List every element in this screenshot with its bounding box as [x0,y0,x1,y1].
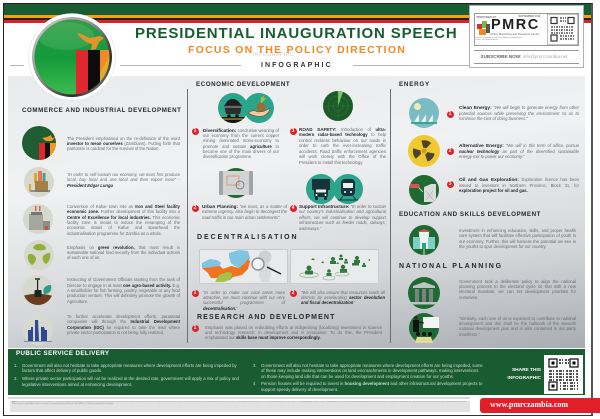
badge 1: 1 [194,290,196,296]
badge 1 [446,110,454,118]
column divider: right [389,89,392,343]
text: idc: To further accelerate development efforts, parastatal companies will through the Industrial Development Corporation (IDC) be required to take the lead where private sector participation is not being fully realized. [67,314,180,335]
icon: green revolution [24,240,54,270]
panel: network of people [290,249,379,284]
header divider lines [10,65,469,66]
qr code [544,355,583,394]
text: clean energy: Clean Energy: “We will begin to generate energy from other potential sources while preserving the environment so as to minimise the cost of doing business.” [459,104,579,121]
pmrc full name: Policy Monitoring and Research Centre [490,32,539,36]
badge 2: 2 [194,204,196,210]
icon: oil can [409,175,439,205]
badge 1 [192,128,198,134]
badge 2 [192,204,198,212]
heading: public service delivery: PUBLIC SERVICE DELIVERY [16,350,109,357]
icon: presenter [409,313,439,343]
badge 1 [192,290,198,296]
text: kafue: Conversion of Kafue town into an Iron and Steel facility economic zone. Further development of this facility into a Centre of Excellence for local industries. This economic facility zone is meant to induce the revamping of the economic status of Kafue and spearhead the industrialisation programme for Zambia as a whole. [67,204,180,236]
delivery item 2: 2. [14,376,18,381]
icon: nuclear [408,135,440,167]
share label [507,368,541,381]
text: buy local quote: “In order to self-sustain our economy, we must first produce local, buy local and use local and then export more” - President Edgar Lungu [67,172,180,188]
delivery item 1: Government will also not hesitate to take appropriate measures where development efforts are being impeded by factors that affect delivery of public goods. [22,362,237,373]
disclaimer box: ABOUT: The Policy Monitoring and Research Centre (PMRC) is a non-partisan policy research institution. This infographic has been prepared for information purposes from the speech delivered by the President at the inauguration. While every effort has been made to ensure accuracy of the information contained here, PMRC accepts no responsibility for errors or omissions. The Policy Monitoring and Research Centre (PMRC) is a non-partisan policy research institution. This infographic has been prepared for information purposes from the speech delivered by the President at the inauguration. While every effort has been made to ensure accuracy of the information contained here, PMRC accepts no responsibility for errors or omissions. The Policy Monitoring and Research Centre (PMRC) is a non-partisan policy research institution. [12,402,467,404]
icon: truck [306,174,334,204]
icon: government building [408,277,440,309]
report date: SEPTEMBER 2016 [518,14,540,18]
icon: hospital school building [409,225,439,255]
infographic label: INFOGRAPHIC [261,62,333,68]
badge 4 [290,204,296,212]
website tag [480,398,600,413]
delivery item 2: Where private sector participation will not be realized at the desired rate, government will apply a mix of policy and legislative interventions aimed at enhancing development. [22,376,239,386]
text: resources quote: “We will also ensure that resources reach all districts by accelerating sector devolution and fiscal decentralization” [301,290,385,305]
share label: INFOGRAPHIC [507,376,541,381]
icon: skyscrapers [24,315,52,345]
delivery item 4: 4. [253,381,257,386]
ghost subtitle: INFOGRAPHIC [253,52,294,58]
title: PRESIDENTIAL INAUGURATION SPEECH [135,25,458,42]
heading: economic development: ECONOMIC DEVELOPMENT [196,80,290,88]
heading: energy: ENERGY [399,81,430,88]
subscribe line: SUBSCRIBE NOW: info@pmrczambia.net [480,54,568,59]
badge 1: 1 [194,128,196,134]
top colour band [3,3,592,23]
icon: factory [23,204,53,234]
badge 2 [290,290,296,296]
delivery item 1: 1. [14,362,18,368]
text: investor: The President emphasised on the re-definition of the word investor to mean ourselves (Zambians). Putting forth that patriotism is cardinal for the survival of the Nation. [67,136,180,151]
heading: commerce and industrial development: COMMERCE AND INDUSTRIAL DEVELOPMENT [22,107,182,114]
icon: hand with seedling [246,93,274,123]
text: urban planning: Urban Planning: “we must, as a matter of extreme urgency, also begin to decongest the road traffic in our main urban settlements”. [202,204,287,220]
text: research: Emphasis was placed on redoubling efforts at indigenising (localizing) investment in science and technology research, in development and in innovation. To do this, the President emphasised our skills base must improve correspondingly. [205,324,382,340]
icon: pmrc logo mark [476,20,492,34]
column divider: left [186,89,189,343]
pmrc wordmark: PMRC [491,17,540,33]
icon: zambia flag [22,126,56,160]
pmrc contact: Research & Analysis Division, Policy Monitoring and Research Centre, info@pmrczambia.net [476,36,522,41]
delivery item 3: 3. [253,362,257,368]
badge 2 [446,148,454,154]
text: alternative energy: Alternative Energy: “We will in this term of office, pursue nuclear technology as part of the diversified sustainable energy mix to power our economy.” [459,142,579,159]
heading: national planning: NATIONAL PLANNING [399,263,503,270]
text: diversification: Diversification: conclusive weaning of our economy from the current copper mining dominated mono-economy to promote and sustain agriculture to become one of the main drivers of our diversification programme. [203,128,279,159]
text: support infrastructure: Support Infrastructure: “In order to sustain our country’s industrialisation and agricultural efforts, we will continue to develop support infrastructure such as feeder roads, railways, waterways.” [299,204,386,231]
badge 3: 3 [292,128,294,134]
badge 3 [290,128,296,134]
main grey panel [8,76,585,348]
subtitle: FOCUS ON THE POLICY DIRECTION [188,44,406,56]
flag badge [28,13,116,101]
prepared by box [474,13,578,46]
badge 4: 4 [292,204,294,210]
heading: education and skills development: EDUCATION AND SKILLS DEVELOPMENT [399,211,541,218]
icon: solar panels [409,98,439,128]
icon: radar [323,91,353,121]
panel: zambia map with magnifier [199,249,288,284]
disclaimer rule [8,397,470,398]
icon: urban plan scroll [219,168,253,198]
badge 1: 1 [194,324,196,330]
badge 1: 1 [449,110,451,116]
heading: research and development: RESEARCH AND DEVELOPMENT [197,314,335,321]
website tag: www.pmrczambia.com [490,400,568,409]
icon: train [334,174,363,204]
panel: public service delivery [8,349,585,395]
subscribe rule top [474,49,578,52]
prepared by label: PREPARED BY [476,14,496,18]
delivery item 3: Government will also not hesitate to take appropriate measures where development efforts are being impeded, some of these may include making interventions on land encroachments in development pathways, making interventions on those keeping land idle that can be used for development and employment creation for our youths. [261,362,483,378]
text: education: Investment in enhancing education, skills, and proper health care system that will facilitate effective participation of youth in our economy. Further, this will harness the potential we see in the youths to spur development for our country. [459,228,576,249]
badge 2: 2 [292,290,294,296]
subscribe rule bottom [474,62,578,64]
text: green revolution: Emphasis on green revolution, that must result in sustainable national food security from the individual actions of each one of us. [67,244,180,260]
badge 1 [192,324,198,332]
badge 2: 2 [449,148,451,154]
icon: shopping basket [24,167,54,197]
icon: coal cart [218,93,246,123]
panel: pmrc credentials [469,5,584,68]
qr code [546,14,578,45]
badge 3 [446,180,454,188]
disclaimer box [10,401,470,412]
badge 3: 3 [449,180,451,186]
text: road safety: ROAD SAFETY: Introduction of ultra-modern radar-based technology to help control reckless behaviour on our roads in order to curb the ever-increasing traffic accidents. Road traffic enforcement agencies will work closely with the Office of the President to install this technology. [299,126,386,165]
icon: shovel and soil [23,275,53,305]
text: government officials: Instructing of Government Officials starting from the rank of Director to engage in at least one agro-based activity. E.g. A smallholder for fish farming, poultry, vegetable or any food production venture. This will definitely promote the growth of Agriculture. [67,277,180,304]
share label: SHARE THIS [512,368,541,373]
text: similarly quote: “Similarly, each one of us is expected to contribute to national development and this shall be the hallmark of the seventh national development plan and is also contained in our party manifesto.” [459,316,576,337]
heading: decentralisation: DECENTRALISATION [197,234,298,241]
text: rural areas quote: “In order to make our rural areas more attractive, we must continue with our very successful programmes of decentralisation.” [203,290,285,311]
delivery item 4: Pension houses will be required to invest in housing development and other infrastructural development projects to support speedy delivery of development. [261,381,482,392]
text: oil and gas: Oil and Gas Exploration: Exploration licence has been issued to investors in Northern Province, Block 31, for exploration project for oil and gas. [459,176,579,193]
text: government policy: Government took a deliberate policy to align the national planning process to the electoral cycle so that with a new electoral mandate, we can set development priorities for ourselves. [459,278,576,300]
